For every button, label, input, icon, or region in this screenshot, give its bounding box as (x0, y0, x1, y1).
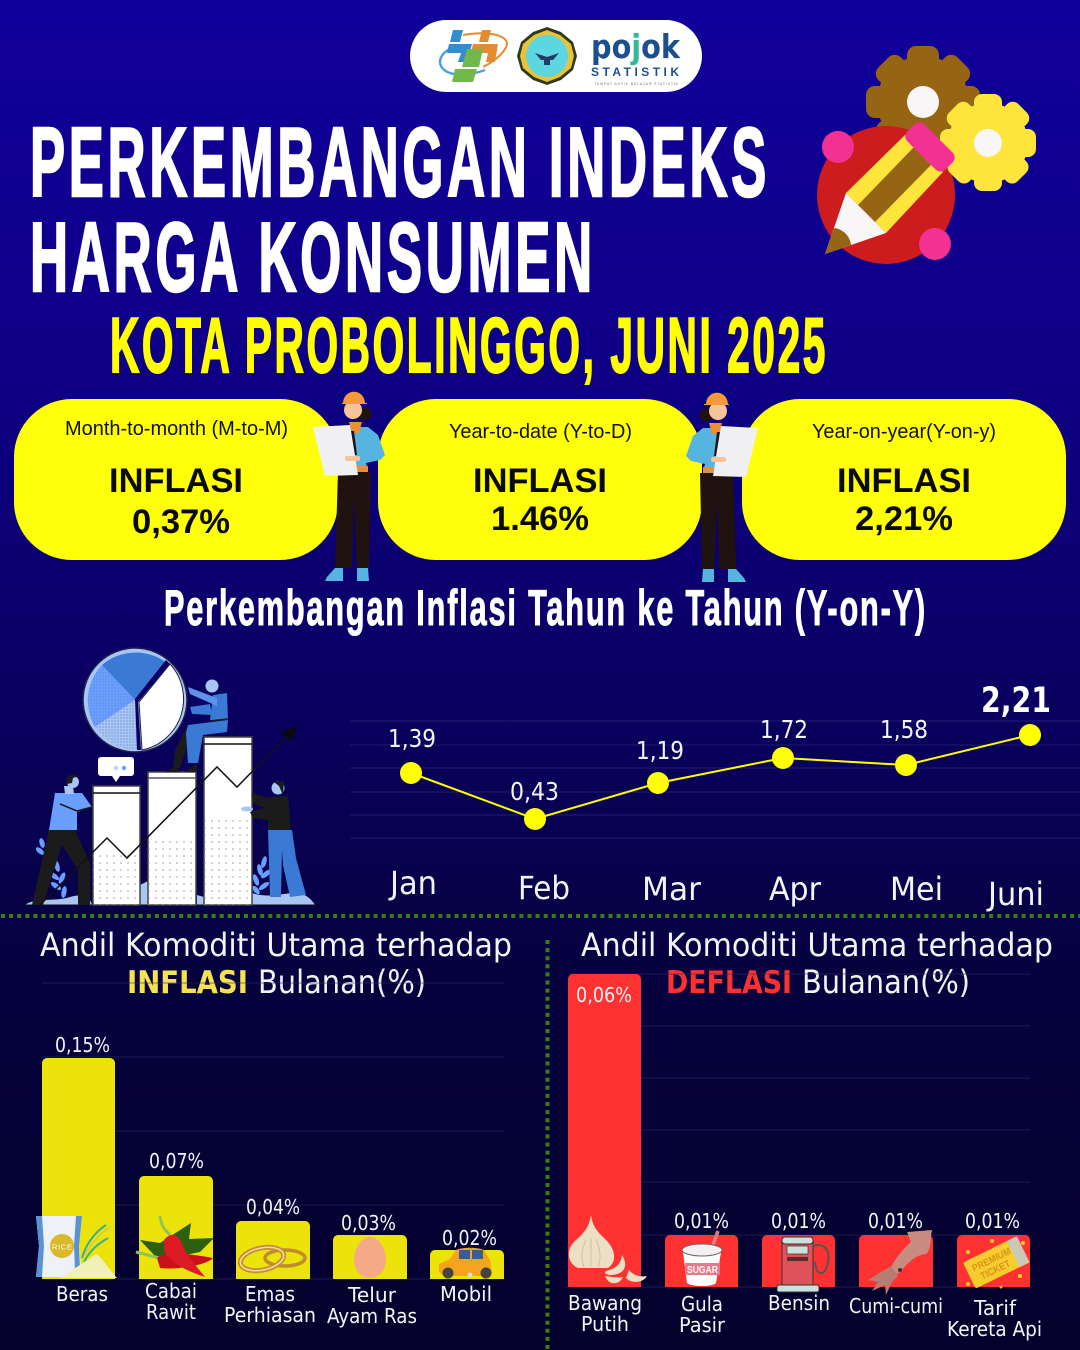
panel: month-to-month: 0,37% (132, 503, 230, 541)
icon: pie chart (83, 648, 187, 752)
logo text: pojok statistik: pojok (591, 27, 681, 66)
bar chart: deflasi (568, 974, 1042, 1341)
icon: car (439, 1248, 492, 1278)
icon: pencil (825, 119, 958, 254)
illustration: team with charts (22, 648, 318, 905)
heading: deflasi (581, 926, 1053, 1001)
category labels: Cabai (145, 1279, 197, 1303)
value labels: 0,06% (576, 983, 632, 1007)
logo pill (410, 20, 702, 92)
data labels: 1,72 (760, 715, 808, 744)
icon: chili (136, 1216, 214, 1277)
category labels: Cumi-cumi (849, 1294, 943, 1318)
value labels: 0,01% (965, 1209, 1020, 1233)
value labels: 0,02% (442, 1226, 497, 1250)
heading: inflasi: INFLASI (127, 965, 248, 1001)
value labels (576, 983, 1020, 1233)
icon: yellow gear (940, 94, 1036, 191)
logo text: pojok statistik: TEMPAT ASYIK BELAJAR STATISTIK (594, 82, 679, 86)
month labels: Jan (388, 864, 437, 902)
heading: deflasi: Andil Komoditi Utama terhadap (581, 926, 1053, 964)
icon: gears and pencil (817, 46, 1036, 264)
category labels: Emas (245, 1282, 295, 1306)
category labels: Bawang (568, 1291, 642, 1315)
icon: rice (36, 1216, 117, 1278)
icon: sugar (682, 1231, 722, 1286)
panel: year-on-year: Year-on-year(Y-on-y) (812, 421, 996, 443)
category labels: Tarif (973, 1296, 1017, 1320)
panel: year-to-date: INFLASI (473, 462, 607, 500)
data points (400, 724, 1041, 830)
data labels: 1,39 (388, 724, 436, 753)
panel: month-to-month (14, 399, 338, 560)
data labels (388, 681, 1051, 806)
icon: red circle (817, 126, 955, 264)
icon: squid (868, 1230, 932, 1295)
category labels: Beras (56, 1282, 108, 1306)
value labels (55, 1033, 497, 1250)
category labels (56, 1279, 492, 1328)
icon: bars (93, 737, 252, 905)
heading: deflasi: DEFLASI (666, 965, 792, 1001)
line chart (350, 681, 1080, 913)
icon: ticket: TICKET (979, 1259, 1012, 1282)
category labels: Mobil (440, 1282, 492, 1306)
value labels: 0,01% (868, 1209, 923, 1233)
category labels: Bensin (768, 1291, 830, 1315)
icon: man left (32, 775, 92, 905)
icon: egg (354, 1237, 386, 1278)
panel: year-to-date: 1.46% (491, 500, 589, 538)
icon: ticket (963, 1236, 1030, 1289)
panel: year-on-year (742, 399, 1066, 560)
icon: rice: RICE (52, 1242, 72, 1252)
icon: ticket: PREMIUM (970, 1246, 1013, 1274)
icon: worker left (313, 392, 385, 581)
value labels: 0,01% (771, 1209, 826, 1233)
value labels: 0,07% (149, 1149, 204, 1173)
icon: rings (238, 1244, 305, 1274)
month labels: Apr (769, 870, 822, 908)
month labels: Mei (890, 870, 943, 908)
category labels: Perhiasan (224, 1303, 316, 1327)
value labels: 0,04% (246, 1195, 300, 1219)
category labels: Telur (347, 1283, 397, 1307)
value labels: 0,15% (55, 1033, 110, 1057)
value labels: 0,03% (341, 1211, 396, 1235)
panel: year-to-date (378, 399, 702, 560)
heading: inflasi (40, 926, 512, 1001)
bar chart: inflasi (36, 983, 504, 1328)
icon: fuel pump (777, 1237, 828, 1292)
logo text: pojok statistik (591, 27, 681, 86)
panel: year-on-year: 2,21% (855, 500, 953, 538)
icon: pink dots (822, 131, 951, 260)
title: HARGA KONSUMEN (30, 202, 596, 312)
category labels: Kereta Api (947, 1317, 1042, 1341)
logo text: pojok statistik: STATISTIK (591, 65, 679, 79)
icon: speech bubble (98, 757, 134, 782)
panel: year-to-date: Year-to-date (Y-to-D) (449, 421, 632, 443)
panel: year-on-year: INFLASI (837, 462, 971, 500)
heading: inflasi: Bulanan(%) (258, 963, 426, 1001)
icon: ground and plants (22, 838, 318, 905)
icon: man right (241, 781, 306, 897)
icon: sugar: SUGAR (687, 1265, 719, 1276)
value labels: 0,01% (674, 1209, 729, 1233)
month labels: Feb (518, 869, 570, 907)
category labels (568, 1291, 1042, 1341)
dotted divider lines (1, 916, 1080, 1350)
icon: brown gear (866, 46, 980, 158)
month labels (388, 864, 1044, 913)
category labels: Gula (681, 1292, 723, 1316)
icon: garlic (569, 1215, 647, 1283)
bars (568, 974, 1030, 1287)
month labels: Mar (642, 870, 702, 908)
data labels: 0,43 (510, 777, 559, 806)
category labels: Ayam Ras (327, 1304, 417, 1328)
title (30, 107, 770, 312)
data labels: 2,21 (981, 681, 1051, 721)
icon: worker right (686, 393, 758, 582)
panel: month-to-month: INFLASI (109, 462, 243, 500)
data labels: 1,19 (636, 736, 684, 765)
icon: BPS logo (440, 30, 507, 82)
category labels: Rawit (146, 1300, 196, 1324)
bars (42, 1058, 504, 1279)
heading: inflasi: Andil Komoditi Utama terhadap (40, 926, 512, 964)
icon: city seal (517, 27, 577, 85)
category labels: Pasir (679, 1313, 726, 1337)
heading: deflasi: Bulanan(%) (802, 963, 970, 1001)
panel: month-to-month: Month-to-month (M-to-M) (65, 418, 288, 440)
icon: man seated (165, 680, 228, 772)
data labels: 1,58 (880, 715, 928, 744)
category labels: Putih (581, 1312, 629, 1336)
month labels: Juni (986, 875, 1044, 913)
arrow: rising trend (40, 726, 297, 905)
